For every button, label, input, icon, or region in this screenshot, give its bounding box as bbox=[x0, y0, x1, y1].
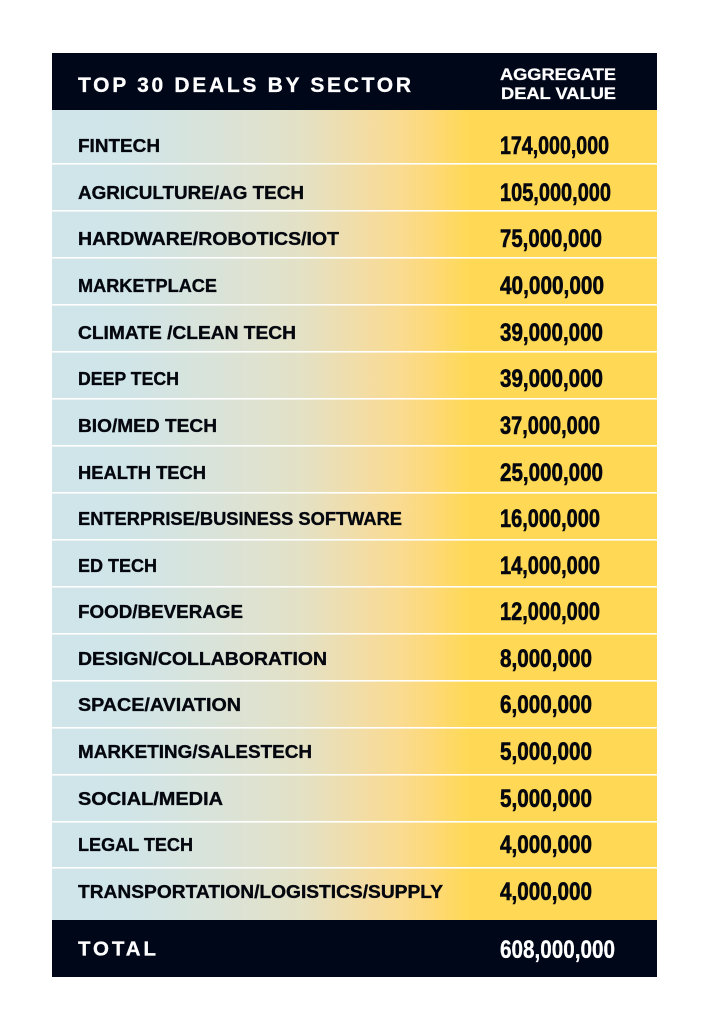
row: health tech: HEALTH TECH bbox=[78, 463, 206, 483]
row: hardware: 75,000,000 bbox=[500, 225, 602, 253]
row: transportation bbox=[78, 878, 592, 906]
row: food/beverage bbox=[78, 598, 600, 626]
row: marketplace: MARKETPLACE bbox=[78, 276, 217, 296]
row: ed tech: 14,000,000 bbox=[500, 552, 600, 580]
row: social: 5,000,000 bbox=[500, 785, 592, 813]
row: climate: CLIMATE /CLEAN TECH bbox=[78, 323, 296, 343]
row: bio/med tech bbox=[78, 412, 600, 440]
row: deep tech bbox=[78, 365, 603, 393]
row: ed tech bbox=[78, 552, 600, 580]
row: deep tech: 39,000,000 bbox=[500, 365, 603, 393]
row: agriculture: AGRICULTURE/AG TECH bbox=[78, 183, 304, 203]
column heading: aggregate deal value bbox=[500, 66, 616, 103]
row: marketing: MARKETING/SALESTECH bbox=[78, 742, 312, 762]
row: legal tech: 4,000,000 bbox=[500, 831, 592, 859]
row: hardware bbox=[78, 225, 602, 253]
row: health tech bbox=[78, 459, 603, 487]
row: climate: 39,000,000 bbox=[500, 319, 603, 347]
row: hardware: HARDWARE/ROBOTICS/IOT bbox=[78, 229, 339, 249]
total bar: TOTAL bbox=[78, 938, 156, 960]
row: enterprise bbox=[78, 505, 600, 533]
row: transportation: TRANSPORTATION/LOGISTICS/SUPPLY bbox=[78, 882, 443, 902]
table body gradient panel bbox=[52, 110, 657, 920]
row: ed tech: ED TECH bbox=[78, 556, 157, 576]
row separators bbox=[52, 163, 657, 869]
column heading: aggregate deal value: DEAL VALUE bbox=[501, 85, 616, 103]
row: social: SOCIAL/MEDIA bbox=[78, 789, 223, 809]
row: legal tech bbox=[78, 831, 592, 859]
row: design: 8,000,000 bbox=[500, 645, 592, 673]
heading: TOP 30 DEALS BY SECTOR bbox=[78, 74, 411, 97]
row: enterprise: 16,000,000 bbox=[500, 505, 600, 533]
row: deep tech: DEEP TECH bbox=[78, 369, 179, 389]
row: fintech bbox=[78, 132, 609, 160]
row: marketing: 5,000,000 bbox=[500, 738, 592, 766]
row: bio/med tech: BIO/MED TECH bbox=[78, 416, 217, 436]
row: enterprise: ENTERPRISE/BUSINESS SOFTWARE bbox=[78, 509, 402, 529]
row: agriculture: 105,000,000 bbox=[500, 179, 611, 207]
row: social bbox=[78, 785, 592, 813]
total bar bbox=[52, 920, 657, 977]
row: marketplace: 40,000,000 bbox=[500, 272, 604, 300]
row: agriculture bbox=[78, 179, 611, 207]
header bar bbox=[52, 53, 657, 110]
row: fintech: 174,000,000 bbox=[500, 132, 609, 160]
row: design bbox=[78, 645, 592, 673]
row: marketplace bbox=[78, 272, 604, 300]
column heading: aggregate deal value: AGGREGATE bbox=[500, 66, 616, 84]
row: transportation: 4,000,000 bbox=[500, 878, 592, 906]
row: space: SPACE/AVIATION bbox=[78, 695, 241, 715]
row: health tech: 25,000,000 bbox=[500, 459, 603, 487]
row: legal tech: LEGAL TECH bbox=[78, 835, 193, 855]
row: marketing bbox=[78, 738, 592, 766]
row: space: 6,000,000 bbox=[500, 691, 592, 719]
row: bio/med tech: 37,000,000 bbox=[500, 412, 600, 440]
total bar: 608,000,000 bbox=[500, 936, 615, 964]
row: climate bbox=[78, 319, 603, 347]
row: fintech: FINTECH bbox=[78, 136, 160, 156]
row: food/beverage: 12,000,000 bbox=[500, 598, 600, 626]
row: space bbox=[78, 691, 592, 719]
row: design: DESIGN/COLLABORATION bbox=[78, 649, 327, 669]
row: food/beverage: FOOD/BEVERAGE bbox=[78, 602, 243, 622]
